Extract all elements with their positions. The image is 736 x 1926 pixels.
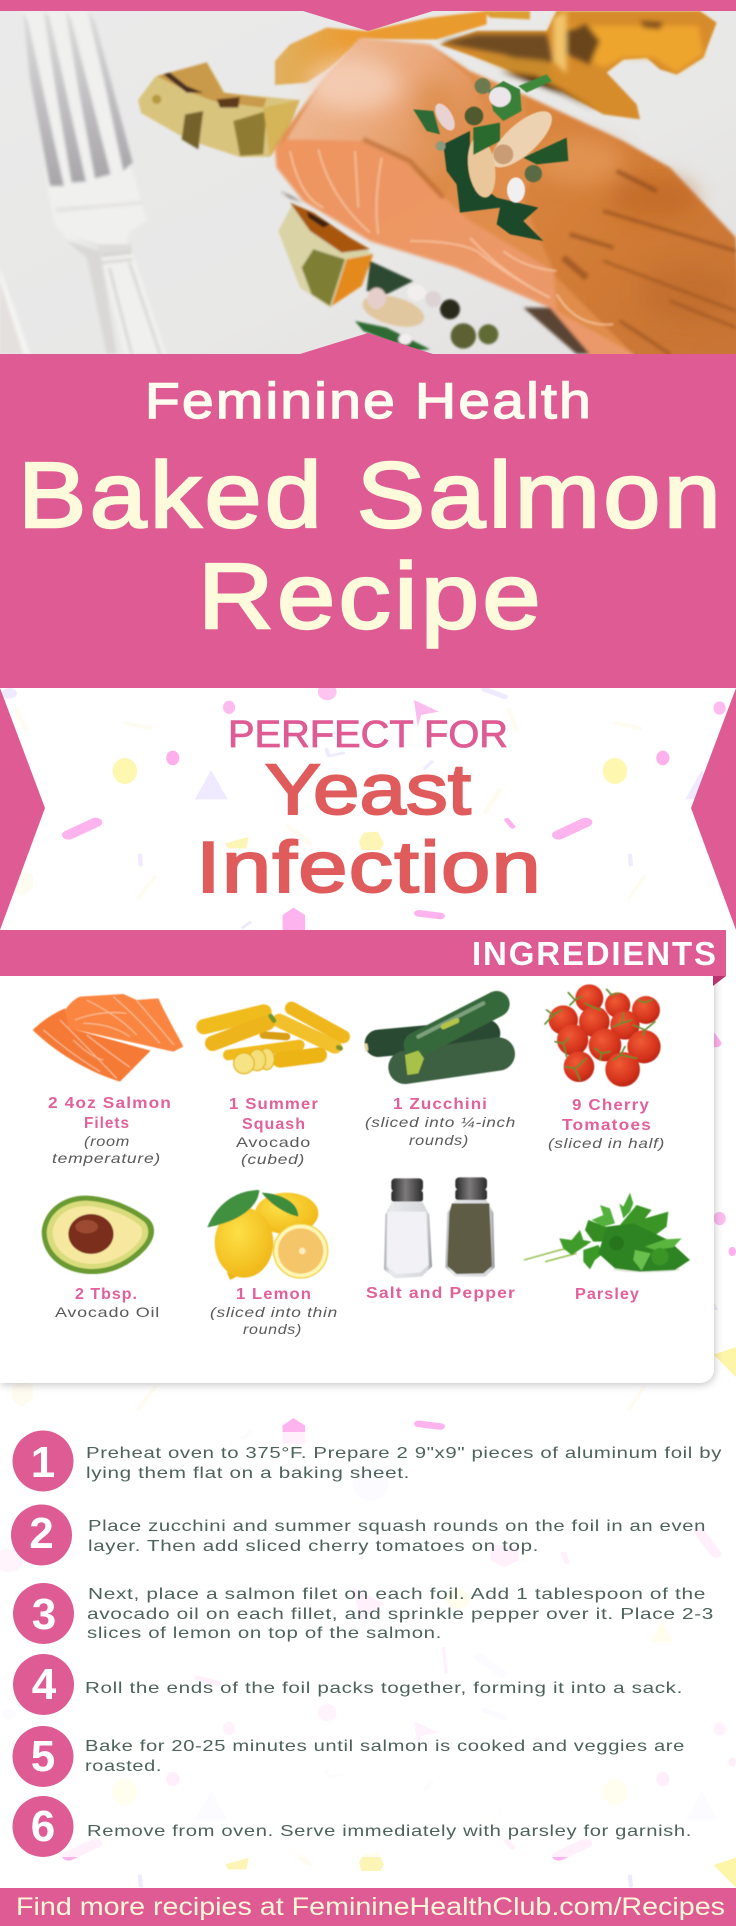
ingredient: lemon xyxy=(210,1286,338,1337)
step 2: Place zucchini and summer squash rounds on the foil in an even xyxy=(88,1518,706,1535)
step 3: 3 xyxy=(32,1590,56,1639)
title banner xyxy=(0,333,736,688)
ingredient: zucchini xyxy=(365,1096,516,1148)
icon: summer squash xyxy=(204,1008,343,1074)
step 4 xyxy=(13,1654,683,1715)
ingredient: salmon filets: (room xyxy=(84,1133,130,1149)
step 3 xyxy=(13,1583,714,1644)
ingredient: summer squash: Squash xyxy=(242,1116,306,1133)
hero photo: baked salmon with squash and fork xyxy=(0,11,736,358)
step 3: avocado oil on each fillet, and sprinkle pepper over it. Place 2-3 xyxy=(87,1606,714,1623)
fork xyxy=(0,11,167,354)
heading: Recipe: Recipe xyxy=(198,544,544,648)
ingredient: zucchini: 1 Zucchini xyxy=(393,1096,488,1113)
ingredient: lemon: (sliced into thin xyxy=(210,1304,338,1320)
step 5: 5 xyxy=(31,1732,55,1781)
step 6: Remove from oven. Serve immediately with parsley for garnish. xyxy=(87,1823,692,1840)
step 6: 6 xyxy=(31,1802,55,1851)
step 5 xyxy=(12,1726,685,1787)
heading: ingredients: INGREDIENTS xyxy=(472,935,716,972)
ingredient: parsley: Parsley xyxy=(575,1286,640,1303)
heading: Infection: Infection xyxy=(196,828,542,908)
icon: salt and pepper shakers xyxy=(384,1177,495,1278)
ingredient: avocado oil xyxy=(55,1286,160,1320)
ingredient: salmon filets: 2 4oz Salmon xyxy=(48,1095,172,1112)
step 4: Roll the ends of the foil packs together, forming it into a sack. xyxy=(85,1680,683,1697)
icon: cherry tomatoes xyxy=(545,984,661,1087)
step 2: 2 xyxy=(29,1509,54,1558)
grilled squash pieces xyxy=(138,62,300,157)
step 1: Preheat oven to 375°F. Prepare 2 9"x9" pieces of aluminum foil by xyxy=(86,1445,722,1462)
heading: Baked Salmon: Baked Salmon xyxy=(18,443,724,547)
icon: parsley xyxy=(524,1193,690,1272)
ingredient: lemon: 1 Lemon xyxy=(236,1286,312,1303)
ingredient: summer squash: Avocado xyxy=(236,1134,311,1150)
confetti background xyxy=(0,683,736,1888)
step 5: roasted. xyxy=(85,1758,162,1775)
icon: avocado half xyxy=(42,1196,154,1274)
ingredient: salt and pepper: Salt and Pepper xyxy=(366,1285,516,1302)
ingredient: cherry tomatoes: Tomatoes xyxy=(562,1117,652,1134)
step 5: Bake for 20-25 minutes until salmon is cooked and veggies are xyxy=(85,1738,685,1755)
ingredient: summer squash: (cubed) xyxy=(241,1151,305,1167)
salmon and garnish xyxy=(275,11,736,358)
panel: ingredients card xyxy=(0,960,714,1383)
step 1 xyxy=(12,1430,722,1492)
top pink band with notch xyxy=(0,0,736,31)
heading: Yeast: Yeast xyxy=(265,751,471,830)
ingredient: cherry tomatoes: 9 Cherry xyxy=(572,1097,650,1114)
ingredient: avocado oil: Avocado Oil xyxy=(55,1304,160,1320)
step 6 xyxy=(12,1796,692,1857)
icon: salmon filets xyxy=(33,994,183,1082)
heading: Feminine Health: Feminine Health xyxy=(145,373,593,429)
step 2 xyxy=(11,1504,706,1566)
ribbon: perfect for yeast infection xyxy=(0,688,736,930)
subheading: perfect for: PERFECT FOR xyxy=(228,714,508,756)
step 2: layer. Then add sliced cherry tomatoes on top. xyxy=(88,1538,539,1555)
step 3: slices of lemon on top of the salmon. xyxy=(87,1625,442,1642)
footer text: Find more recipies at FeminineHealthClub.com/Recipes xyxy=(16,1893,725,1921)
ingredient: lemon: rounds) xyxy=(243,1321,302,1337)
ingredient: summer squash: 1 Summer xyxy=(229,1096,319,1113)
ingredient: avocado oil: 2 Tbsp. xyxy=(75,1286,138,1303)
ingredient: cherry tomatoes: (sliced in half) xyxy=(548,1135,665,1151)
ingredient: salmon filets: Filets xyxy=(84,1115,130,1132)
ingredient: zucchini: rounds) xyxy=(409,1132,469,1148)
ingredient: cherry tomatoes xyxy=(548,1097,665,1151)
ingredient: zucchini: (sliced into ¼-inch xyxy=(365,1114,516,1130)
footer band xyxy=(0,1888,736,1926)
ingredients header band xyxy=(0,930,726,986)
step 4: 4 xyxy=(32,1660,57,1709)
ingredient: salmon filets: temperature) xyxy=(52,1150,161,1166)
ingredient: summer squash xyxy=(229,1096,319,1167)
icon: lemons xyxy=(207,1190,328,1280)
step 1: 1 xyxy=(31,1438,55,1487)
ingredient: salmon filets xyxy=(48,1095,172,1166)
step 1: lying them flat on a baking sheet. xyxy=(86,1465,410,1482)
step 3: Next, place a salmon filet on each foil. Add 1 tablespoon of the xyxy=(88,1586,706,1603)
icon: zucchini xyxy=(366,1003,498,1075)
